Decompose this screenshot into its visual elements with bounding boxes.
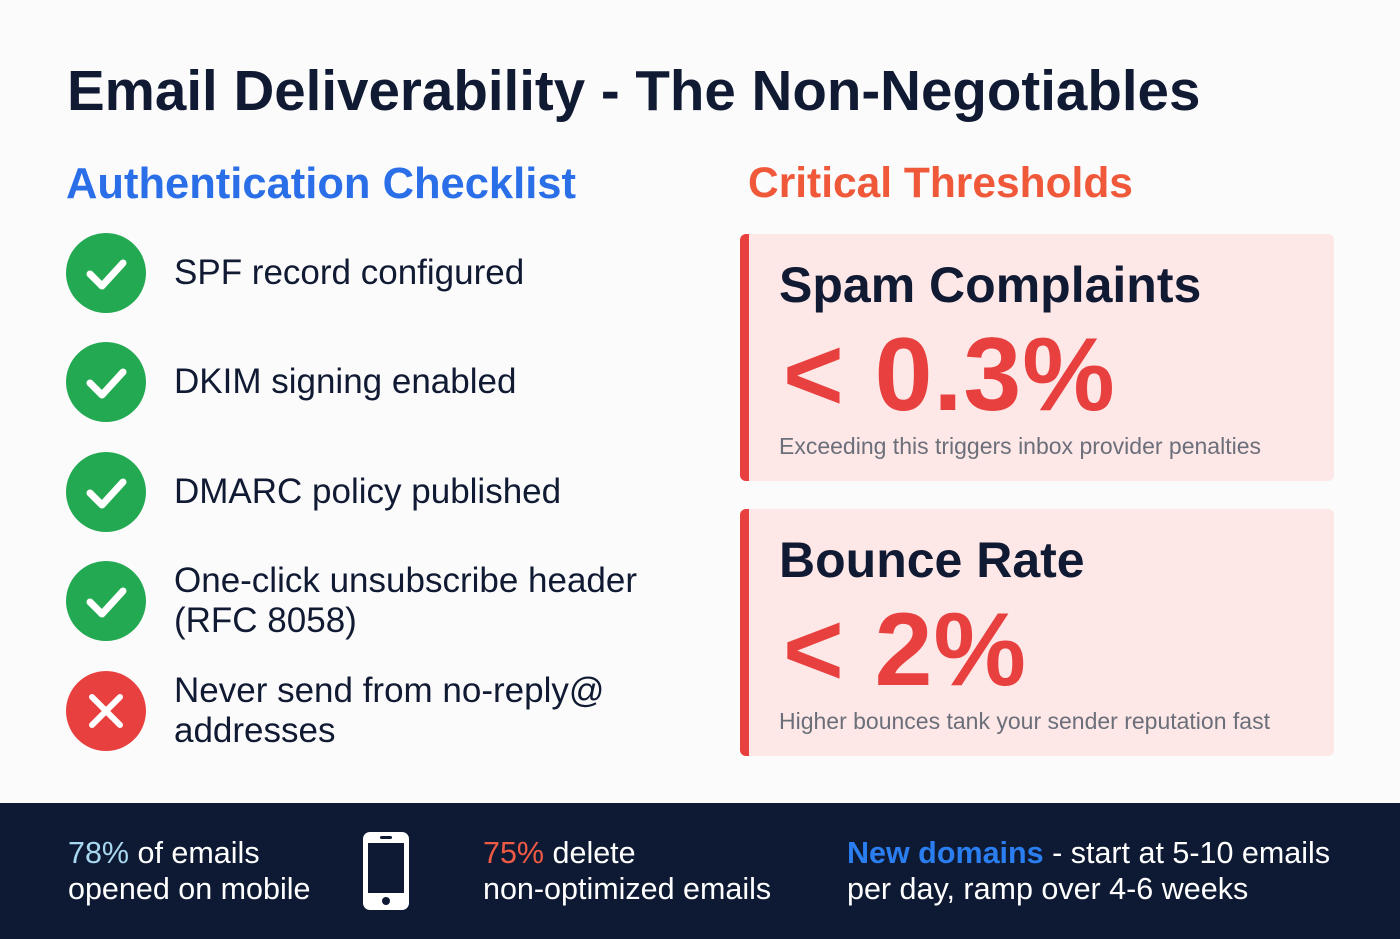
card: spam complaints: [740, 234, 1334, 481]
stat: delete: non-optimized emails: [483, 872, 771, 906]
stat: delete: 75% delete: [483, 836, 636, 870]
card: spam complaints: < 0.3%: [783, 317, 1116, 433]
checklist item: SPF: [66, 233, 524, 313]
checklist item: no-reply: Never send from no-reply@: [174, 671, 604, 710]
checklist item: no-reply: addresses: [174, 711, 335, 750]
checklist item: unsubscribe: [66, 561, 637, 641]
stat: new domains: New domains - start at 5-10 emails: [847, 836, 1330, 870]
icon: phone: [363, 832, 409, 910]
card: bounce rate: Higher bounces tank your sender reputation fast: [779, 708, 1270, 734]
card: bounce rate: [740, 509, 1334, 756]
stat: mobile: 78% of emails: [68, 836, 260, 870]
checklist item: DKIM: [66, 342, 516, 422]
checklist item: DMARC: DMARC policy published: [174, 472, 561, 511]
bottom bar: [0, 803, 1400, 939]
stat: new domains: [847, 836, 1330, 906]
checklist item: no-reply: [66, 671, 604, 751]
card: spam complaints: Exceeding this triggers inbox provider penalties: [779, 433, 1261, 459]
stat: delete: [483, 836, 771, 906]
checklist item: DKIM: DKIM signing enabled: [174, 362, 516, 401]
heading: authentication checklist: Authentication Checklist: [66, 160, 576, 208]
card: bounce rate: Bounce Rate: [779, 532, 1085, 588]
stat: mobile: opened on mobile: [68, 872, 310, 906]
card: bounce rate: < 2%: [783, 592, 1027, 708]
checklist item: SPF: SPF record configured: [174, 253, 524, 292]
stat: new domains: per day, ramp over 4-6 weeks: [847, 872, 1248, 906]
stat: mobile: [68, 836, 310, 906]
checklist item: unsubscribe: One-click unsubscribe header: [174, 561, 637, 600]
heading: critical thresholds: Critical Thresholds: [748, 160, 1133, 207]
title: Email Deliverability - The Non-Negotiables: [67, 59, 1200, 122]
card: spam complaints: Spam Complaints: [779, 257, 1201, 313]
checklist item: unsubscribe: (RFC 8058): [174, 601, 357, 640]
checklist item: DMARC: [66, 452, 561, 532]
